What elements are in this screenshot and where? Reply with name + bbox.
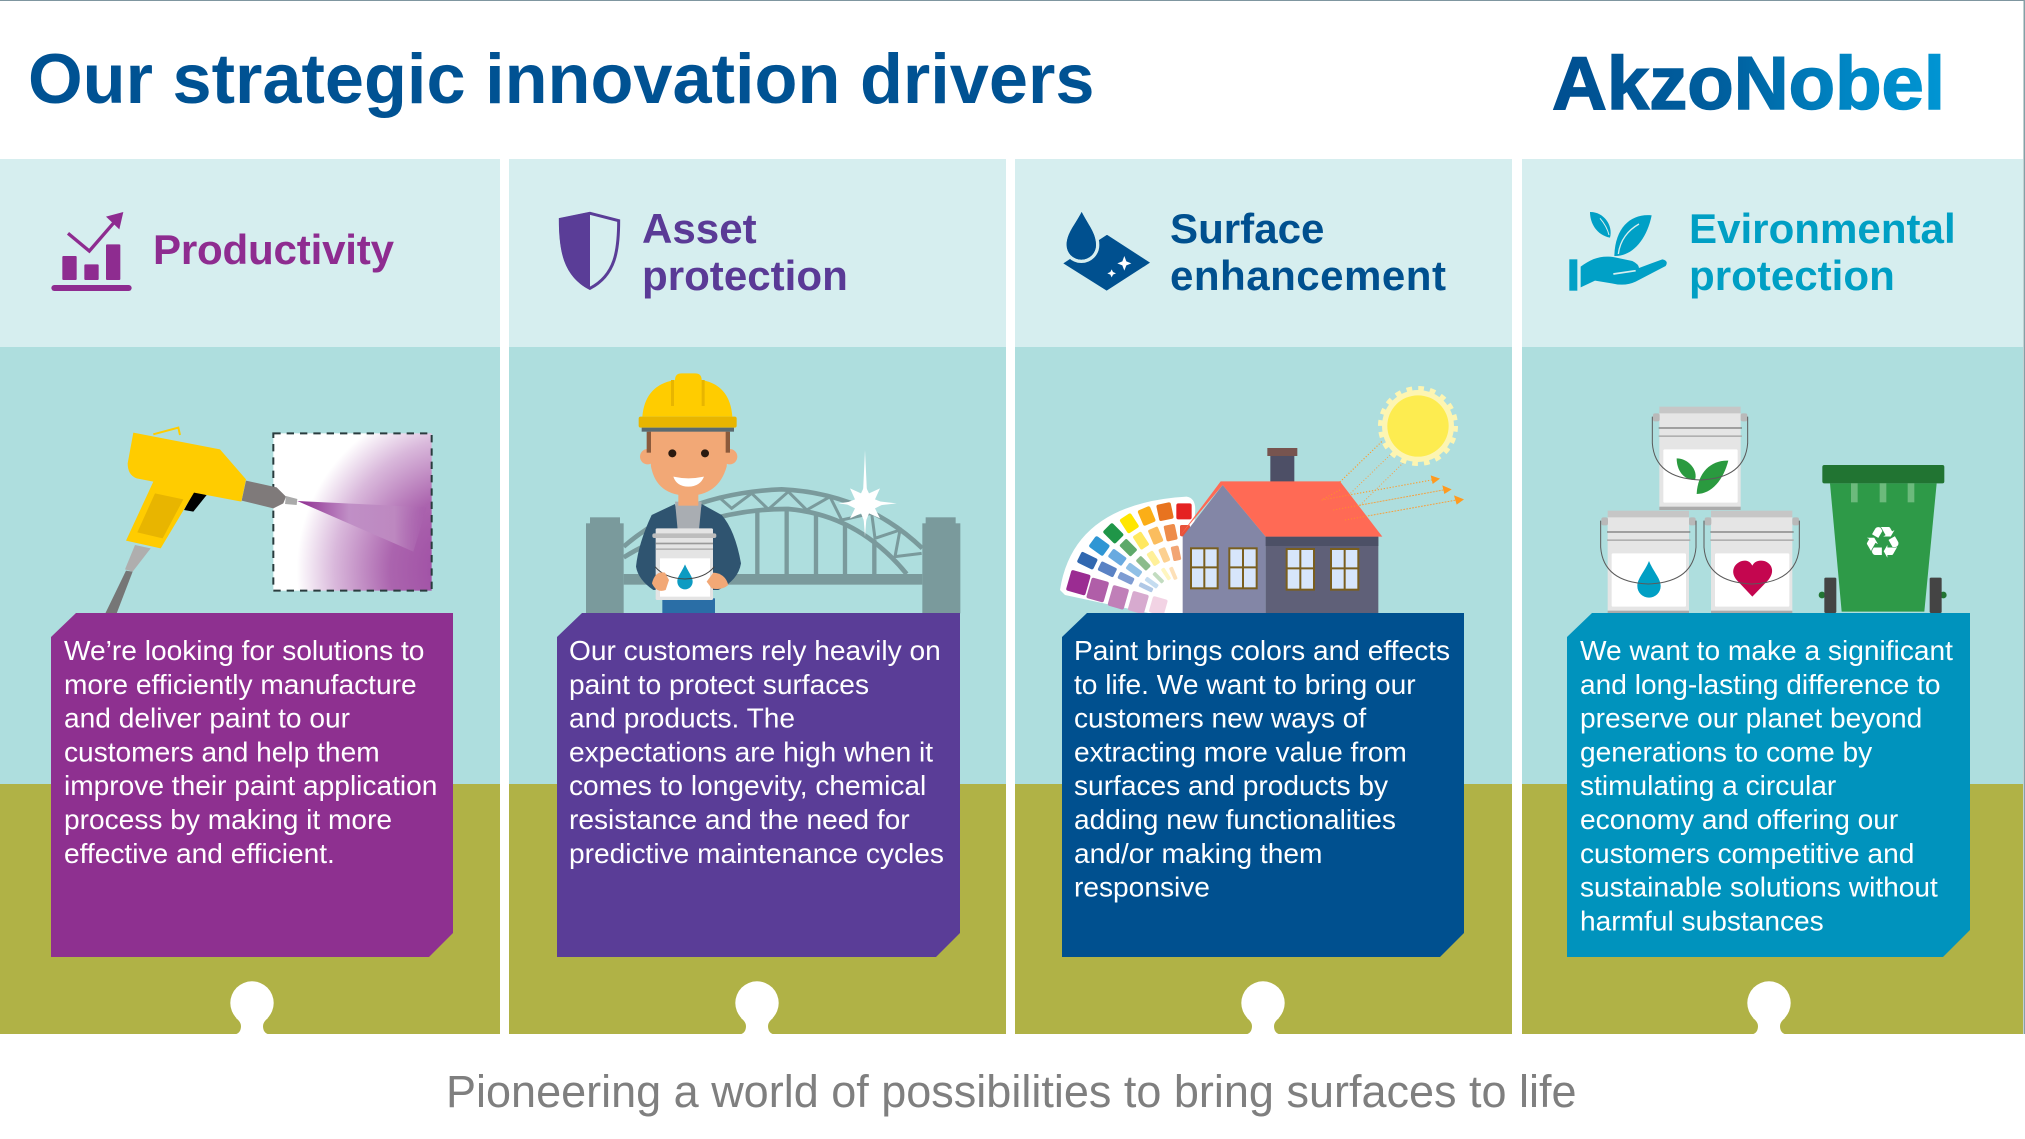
puzzle notch — [1747, 981, 1791, 1034]
illustration: colour fan, house and sun — [1060, 389, 1464, 616]
heading: surface enhancement: Surface — [1170, 205, 1324, 252]
text box: surface enhancement: adding new functionalities — [1074, 804, 1396, 835]
text box: productivity: customers and help them — [64, 736, 380, 767]
recycling bin: ♻ — [1863, 518, 1902, 568]
text box: environmental protection: sustainable solutions without — [1580, 872, 1938, 903]
bridge — [586, 489, 960, 613]
text box: productivity: and deliver paint to our — [64, 703, 350, 734]
text box: environmental protection: preserve our planet beyond — [1580, 703, 1922, 734]
text box: productivity: We’re looking for solutions to — [64, 635, 424, 666]
arrowheads — [1431, 475, 1464, 505]
panel: asset protection — [509, 159, 1006, 1034]
text box: productivity — [51, 613, 453, 957]
text box: productivity: effective and efficient. — [64, 838, 335, 869]
top border line — [0, 0, 2025, 1]
heading: asset protection: Asset — [642, 205, 757, 252]
text box: asset protection: comes to longevity, chemical — [569, 770, 926, 801]
engineer — [636, 373, 741, 613]
heading: productivity: Productivity — [153, 226, 395, 273]
panel: surface enhancement — [1015, 159, 1512, 1034]
text box: surface enhancement: Paint brings colors and effects — [1074, 635, 1450, 666]
text box: asset protection: paint to protect surfaces — [569, 669, 869, 700]
recycling bin — [1819, 465, 1947, 613]
text box: surface enhancement: responsive — [1074, 872, 1210, 903]
text box: environmental protection: economy and offering our — [1580, 804, 1898, 835]
text box: asset protection: and products. The — [569, 703, 795, 734]
panel: productivity — [0, 159, 500, 1034]
bucket: leaves — [1652, 407, 1748, 510]
title: Our strategic innovation drivers — [28, 39, 1094, 118]
illustration: paint buckets and recycling bin — [1601, 407, 1947, 614]
text box: surface enhancement: and/or making them — [1074, 838, 1322, 869]
puzzle notch — [230, 981, 274, 1034]
text box: environmental protection: stimulating a circular — [1580, 770, 1836, 801]
text box: environmental protection: generations to come by — [1580, 736, 1872, 767]
sun — [1381, 389, 1455, 463]
text box: asset protection: predictive maintenance cycles — [569, 838, 944, 869]
text box: environmental protection: and long-lasting difference to — [1580, 669, 1940, 700]
panel: environmental protection — [1522, 159, 2023, 1034]
text box: environmental protection — [1567, 613, 1970, 957]
text box: productivity: process by making it more — [64, 804, 392, 835]
puzzle notch — [735, 981, 779, 1034]
colour fan — [1060, 497, 1195, 616]
heading: asset protection: protection — [642, 252, 848, 299]
text box: asset protection — [557, 613, 960, 957]
illustration: engineer with paint bucket and bridge — [586, 373, 960, 613]
house — [1179, 448, 1382, 613]
icon: hand holding leaves — [1569, 212, 1667, 291]
text box: surface enhancement: surfaces and products by — [1074, 770, 1388, 801]
text box: surface enhancement: to life. We want to bring our — [1074, 669, 1416, 700]
text box: environmental protection: customers competitive and — [1580, 838, 1914, 869]
illustration: spray gun painting a panel — [105, 428, 432, 613]
heading: environmental protection: Evironmental — [1689, 205, 1956, 252]
heading: surface enhancement: enhancement — [1170, 252, 1446, 299]
sun rays — [1322, 442, 1457, 520]
icon: drop on surface — [1063, 212, 1150, 291]
reflected rays — [1322, 442, 1457, 520]
tagline: Pioneering a world of possibilities to bring surfaces to life — [446, 1066, 1577, 1117]
text box: productivity: more efficiently manufacture — [64, 669, 417, 700]
text box: asset protection: resistance and the need for — [569, 804, 910, 835]
puzzle notch — [1241, 981, 1285, 1034]
AkzoNobel logo: AkzoNobel — [1552, 41, 1945, 125]
bucket: water drop — [1601, 511, 1696, 614]
text box: surface enhancement: customers new ways of — [1074, 703, 1366, 734]
text box: environmental protection: harmful substances — [1580, 905, 1824, 936]
text box: asset protection: Our customers rely heavily on — [569, 635, 941, 666]
icon: shield — [559, 212, 619, 290]
text box: productivity: improve their paint application — [64, 770, 437, 801]
right border line — [2024, 0, 2025, 1034]
sparkle — [838, 450, 897, 537]
text box: surface enhancement — [1062, 613, 1464, 957]
heading: environmental protection: protection — [1689, 252, 1895, 299]
text box: surface enhancement: extracting more value from — [1074, 736, 1407, 767]
text box: environmental protection: We want to make a significant — [1580, 635, 1953, 666]
bucket: heart — [1704, 511, 1799, 614]
icon: bar chart with rising arrow — [51, 212, 132, 291]
text box: asset protection: expectations are high when it — [569, 736, 933, 767]
